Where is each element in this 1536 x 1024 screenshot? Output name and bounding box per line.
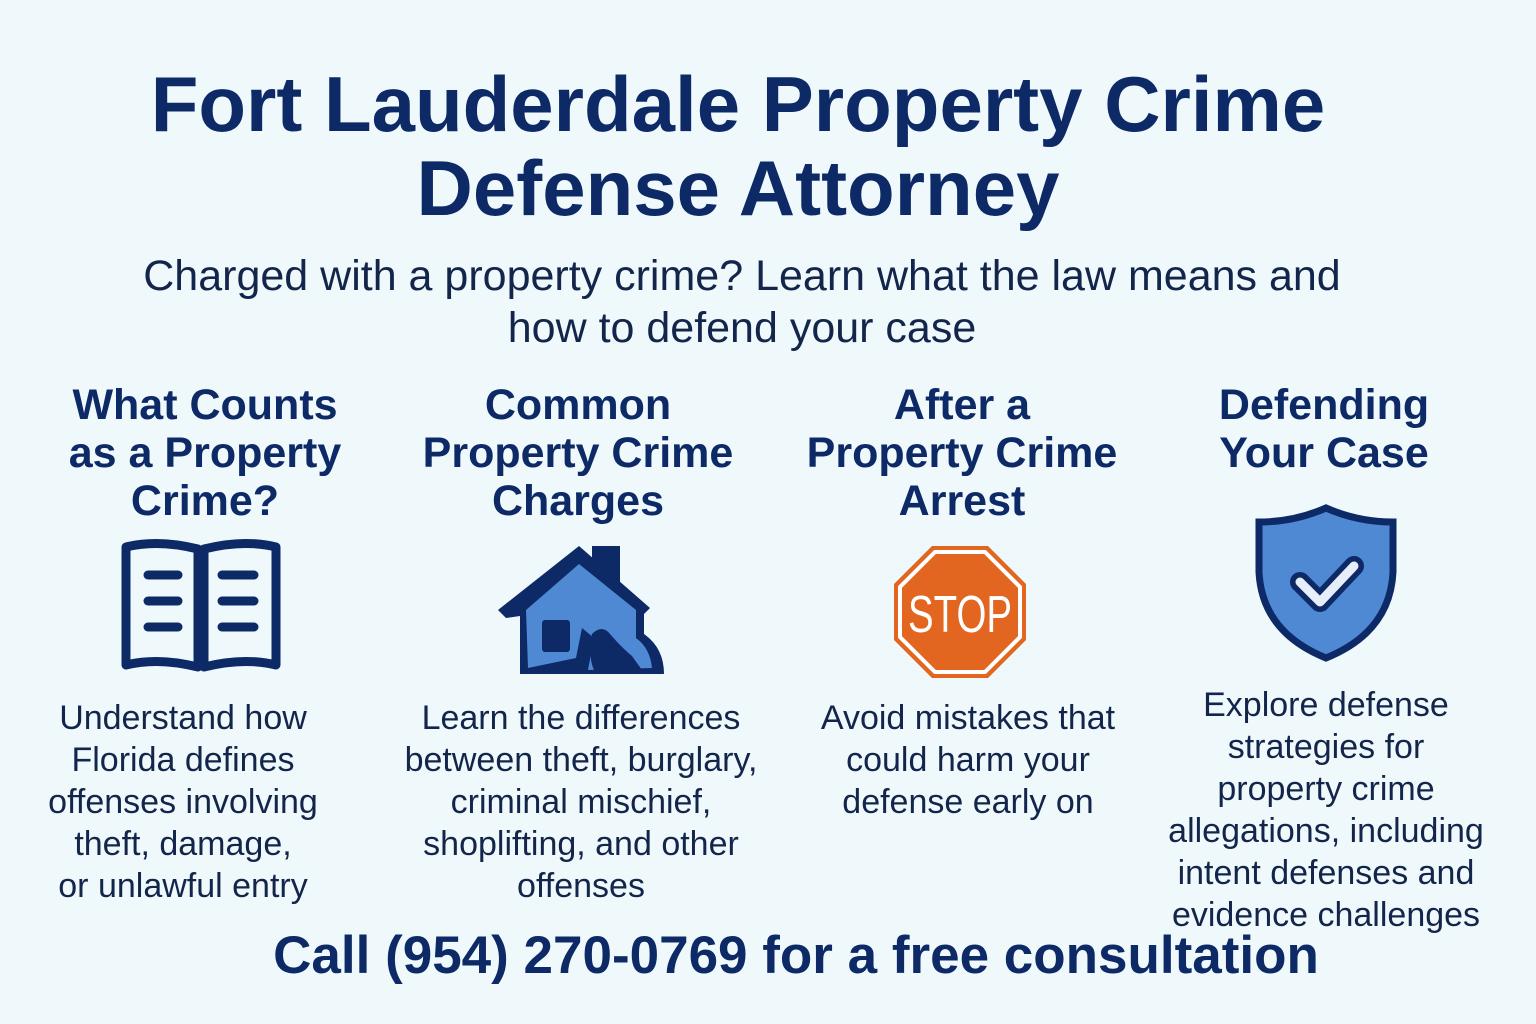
heading: after arrest: Property Crime [807,429,1117,477]
text: col 1 [48,699,318,905]
text: col 4: Explore defense [1203,686,1449,724]
title: Defense Attorney [417,144,1059,232]
heading: what counts [69,381,341,525]
heading: defending: Defending [1219,381,1429,429]
heading: common charges [423,381,733,525]
text: col 1: or unlawful entry [58,867,308,905]
heading: defending [1219,381,1429,477]
heading: common charges: Charges [492,477,664,525]
text: col 2: Learn the differences [422,699,740,737]
heading: common charges: Property Crime [423,429,733,477]
text: col 2: between theft, burglary, [405,741,757,779]
text: col 3: defense early on [842,783,1094,821]
heading: after arrest: Arrest [899,477,1025,525]
text: col 1: Florida defines [71,741,294,779]
text: col 3 [821,699,1115,821]
icon: shield [1256,504,1396,662]
text: col 1: offenses involving [48,783,318,821]
text: col 4 [1168,686,1484,934]
text: col 1: theft, damage, [74,825,292,863]
subtitle [143,252,1341,352]
heading: common charges: Common [485,381,671,429]
title [151,60,1325,232]
text: col 4: intent defenses and [1178,854,1474,892]
title: Fort Lauderdale Property Crime [151,60,1325,148]
heading: after arrest [807,381,1117,525]
text: col 4: evidence challenges [1172,896,1480,934]
text: col 1: Understand how [59,699,307,737]
icon: book [122,539,280,672]
text: col 4: allegations, including [1168,812,1484,850]
text: col 4: strategies for [1228,728,1424,766]
text: col 4: property crime [1217,770,1435,808]
heading: what counts: What Counts [72,381,338,429]
subtitle: Charged with a property crime? Learn what the law means and [143,252,1341,300]
icon: house [498,546,664,674]
heading: after arrest: After a [894,381,1030,429]
text: col 2 [405,699,757,905]
heading: defending: Your Case [1219,429,1429,477]
text: col 2: criminal mischief, [451,783,711,821]
text: col 3: could harm your [846,741,1090,779]
subtitle: how to defend your case [508,304,976,352]
text: col 3: Avoid mistakes that [821,699,1115,737]
heading: what counts: Crime? [131,477,279,525]
icon: stop sign [894,546,1026,678]
text: col 2: offenses [517,867,645,905]
heading: what counts: as a Property [69,429,341,477]
text: col 2: shoplifting, and other [423,825,739,863]
footer call to action: Call (954) 270-0769 for a free consultation [273,926,1319,985]
